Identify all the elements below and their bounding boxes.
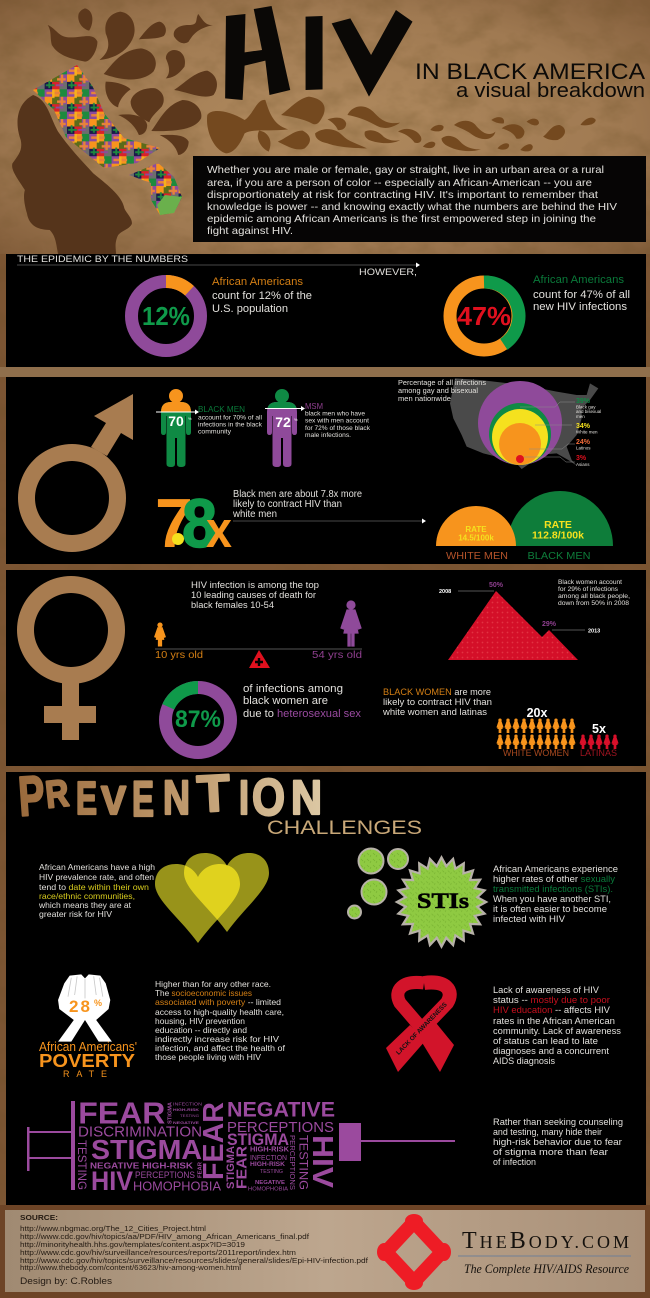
heading: prevention: N [163,772,190,825]
heading: prevention: I [239,772,249,825]
text: decline caption: down from 50% in 2008 [558,600,629,607]
chart: stigma syringe word cloud [27,1095,455,1196]
heading: prevention: N [291,772,322,825]
chart: stigma syringe word cloud: HIV [91,1166,133,1196]
chart: 20x pictogram white women: 20x [527,706,547,720]
text: dating within communities: HIV prevalence rate, and often [39,872,154,882]
text: sources: SOURCE: [20,1213,58,1222]
icon: red awareness ribbon: LACK OF AWARENESS [395,1001,449,1057]
text: 12% of population [212,276,312,315]
text: decline caption: for 29% of infections [558,586,619,593]
chart: infection rate semicircles: 14.5/100k [458,534,494,542]
legend: circle values [576,398,601,467]
text block: introduction panel: fight against HIV. [207,225,293,237]
chart: stigma syringe word cloud: HOMOPHOBIA [133,1178,221,1194]
chart: 20x pictogram white women [497,706,575,758]
text: other STIs: African Americans experience [493,864,618,874]
chart: stigma syringe word cloud: TESTING [260,1169,283,1175]
text block: introduction panel: area, if you are a person of color -- especially an African-American -- you are [207,177,592,189]
chart: stigma syringe word cloud: INFECTION [250,1155,287,1162]
chart: stigma syringe word cloud: PERCEPTIONS [227,1120,334,1136]
icon: black men figure 70%: % [188,416,192,421]
panel: the epidemic by the numbers [6,254,646,367]
chart: infection rate semicircles: 112.8/100k [532,530,584,542]
text: heterosexual sex: black women are [243,695,328,707]
header illustration: flowing drops [48,8,596,155]
text: lack of awareness: AIDS diagnosis [493,1056,555,1066]
heading: epidemic by the numbers: HOWEVER, [359,267,417,278]
icon: overlapping hearts [155,853,269,943]
text: map caption: Percentage of all infections [398,378,486,387]
legend: circle values: 24% [576,439,591,446]
text: other STIs: transmitted infections (STIs). [493,884,613,894]
icon: poverty rate hands 28%: POVERTY [39,1051,135,1071]
chart: stigma syringe word cloud: HIGH-RISK [250,1147,289,1154]
chart: 5x pictogram latinas [580,722,618,758]
text: socioeconomic issues: access to high-quality health care, [155,1007,284,1017]
text: 47% of infections: African Americans [533,274,625,286]
chart: 87% donut [166,688,230,752]
text block: introduction panel: disproportionately at risk for contracting HIV. It's important to remember that [207,189,598,201]
icon: poverty rate hands 28%: 28 [69,997,92,1016]
text: socioeconomic issues: education -- directly and [155,1025,247,1035]
chart: 2008 to 2013 decline: 2008 [439,589,451,595]
chart: stigma syringe word cloud: TESTING [75,1140,89,1190]
text block: introduction panel: epidemic among African Americans is the first empowered step in joining the [207,213,596,225]
chart: age timeline with figures [155,601,362,668]
text: map caption: among gay and bisexual [398,386,478,395]
big number: 7.8x: 7 [155,484,193,562]
chart: stigma syringe word cloud: HOMOPHOBIA [248,1186,289,1192]
icon: red linked hands logo [377,1214,451,1290]
text block: introduction panel: knowledge is power -- and knowing exactly what the numbers are behind the HIV [207,201,617,213]
logo: TheBody.com wordmark: The Complete HIV/AIDS Resource [464,1261,629,1276]
chart: 12% donut [132,282,200,350]
text: MSM stat: black men who have [305,410,365,418]
chart: stigma syringe word cloud: INFECTION [173,1102,202,1106]
heading: epidemic by the numbers [17,254,420,278]
text: sources: http://www.cdc.gov/hiv/surveillance/resources/reports/2011report/index.htm [20,1248,296,1257]
text: black women more likely: likely to contract HIV than [383,697,492,708]
icon: poverty rate hands 28%: % [94,998,102,1008]
text: other STIs [493,864,618,924]
text: other STIs: higher rates of other sexually [493,874,616,884]
chart: stigma syringe word cloud: STIGMA [227,1130,289,1149]
text: dating within communities [38,862,155,919]
text: other STIs: When you have another STI, [493,894,611,904]
heading: prevention: V [101,779,126,823]
text: lack of awareness: Lack of awareness of HIV [493,985,599,995]
text: 7.8x more likely: Black men are about 7.8x more [233,489,362,500]
icon: patterned head scarf [33,65,182,215]
icon: poverty rate hands 28%: RATE [63,1069,107,1079]
chart: infection rate semicircles: WHITE MEN [446,550,508,562]
text: socioeconomic issues: indirectly increase risk for HIV [155,1034,279,1044]
icon: STIs germ cluster [348,848,488,949]
text: leading causes of death [191,580,319,611]
chart: infection rate semicircles: RATE [544,519,572,531]
icon: syringe plunger and needle [27,1101,455,1190]
text: sources: Design by: C.Robles [20,1276,113,1286]
text: dating within communities: African Americans have a high [39,862,155,872]
text: sources: http://www.cdc.gov/hiv/topics/aa/PDF/HIV_among_African_Americans_final.pdf [20,1232,309,1241]
heading: prevention: T [196,764,232,824]
icon: black men figure 70%: 70 [168,413,184,429]
text: map caption [398,378,486,403]
chart: stigma syringe word cloud: STIGMA [91,1134,202,1165]
text: decline caption: among all black people, [558,593,630,600]
text: 7.8x more likely: white men [232,509,277,520]
text: lack of awareness: status -- mostly due to poor [493,995,610,1005]
legend: circle values: 34% [576,423,591,430]
legend: circle values: White men [576,430,598,434]
text block: introduction panel [193,156,646,242]
chart: stigma syringe word cloud: FEAR [198,1102,230,1180]
text: sources: http://www.cdc.gov/hiv/topics/surveillance/resources/slides/general/slides/Epi-HIV-infection.pdf [20,1256,368,1265]
text: decline caption: Black women account [558,579,622,586]
text: 12% of population: U.S. population [212,303,288,315]
icon: female symbol [17,576,125,740]
chart: 12% donut: 12% [142,301,190,331]
text: fear of stigma: high-risk behavior due to fear [493,1137,622,1147]
chart: stigma syringe word cloud: DISCRIMINATION [78,1125,202,1141]
text: leading causes of death: HIV infection is among the top [191,580,319,591]
text: socioeconomic issues [155,979,286,1062]
text: other STIs: it is often easier to become [493,904,607,914]
text: black men stat: community [198,428,232,436]
text: dating within communities: greater risk for HIV [39,909,112,919]
text: leading causes of death: 10 leading causes of death for [191,590,316,601]
chart: 5x pictogram latinas: 5x [592,722,606,736]
legend: circle values: men [576,414,585,419]
chart: 47% donut: 47% [457,301,511,331]
heading: prevention: P [16,763,47,828]
icon: head silhouette [12,95,132,254]
chart: 2008 to 2013 decline: 50% [489,582,504,589]
icon: poverty rate hands 28% [39,974,137,1079]
heading: challenges: CHALLENGES [267,817,422,839]
text: black men stat: account for 70% of all [198,414,263,422]
text: leading causes of death: black females 10-54 [191,600,274,611]
chart: stigma syringe word cloud: TESTING [180,1114,199,1118]
text: black men stat: infections in the black [198,422,263,428]
chart: stigma syringe word cloud: NEGATIVE [255,1180,286,1186]
text: lack of awareness: rates in the African American [493,1016,615,1026]
chart: age timeline with figures: 54 yrs old [312,650,362,661]
text: fear of stigma: of stigma more than fear [493,1147,608,1157]
big number: 7.8x: x [206,501,232,558]
subtitle: in black america: IN BLACK AMERICA [415,59,645,84]
icon: STIs germ cluster: STIs [417,888,470,913]
text: heterosexual sex: of infections among [243,683,343,695]
chart: 2008 to 2013 decline: 2013 [588,628,600,634]
icon: black men figure 70% [156,389,199,467]
chart: 5x pictogram latinas: LATINAS [580,748,617,758]
chart: stigma syringe word cloud: STIGMA [225,1146,237,1189]
panel: men [6,377,646,564]
text: socioeconomic issues: Higher than for any other race. [155,979,271,989]
text: socioeconomic issues: infection, and affect the health of [155,1043,286,1053]
text: fear of stigma [493,1117,623,1167]
heading: prevention: E [76,772,97,824]
text: decline caption [558,579,630,607]
chart: 87% donut: 87% [175,706,221,733]
text: 47% of infections: new HIV infections [533,301,628,313]
text: MSM stat [305,401,371,439]
legend: circle values: 39% [576,398,591,405]
chart: infection rate semicircles [436,491,613,562]
icon: MSM figure 72% [265,389,305,467]
text: lack of awareness: diagnoses and a concurrent [493,1046,610,1056]
legend: circle values: and bisexual [576,409,601,414]
text: sources [20,1213,368,1286]
heading: prevention: E [132,771,154,827]
subtitle: in black america: a visual breakdown [456,80,645,102]
chart: stigma syringe word cloud: NEGATIVE [227,1098,335,1122]
chart: age timeline with figures: 10 yrs old [155,650,203,661]
heading: epidemic by the numbers: THE EPIDEMIC BY THE NUMBERS [17,254,188,265]
icon: poverty rate hands 28%: African Americans' [39,1039,137,1054]
text: MSM stat: for 72% of those black [305,425,371,432]
chart: stigma syringe word cloud: FEAR [78,1095,165,1130]
subtitle: in black america [415,59,645,102]
text: lack of awareness: community. Lack of awareness [493,1026,622,1036]
text: fear of stigma: Rather than seeking counseling [493,1117,623,1127]
text: sources: http://minorityhealth.hhs.gov/templates/content.aspx?ID=3019 [20,1240,245,1249]
chart: 47% donut [450,282,519,350]
panel: footer sources and logo [0,1205,650,1298]
chart: stigma syringe word cloud: NEGATIVE [173,1120,199,1125]
text: sources: http://www.nbgmac.org/The_12_Cities_Project.html [20,1224,206,1233]
chart: stigma syringe word cloud: PERCEPTIONS [135,1170,195,1181]
chart: stigma syringe word cloud: FEAR [234,1146,250,1189]
text: 47% of infections: count for 47% of all [533,289,630,301]
text: MSM stat: sex with men account [305,418,369,424]
text: socioeconomic issues: housing, HIV prevention [155,1016,245,1026]
chart: stigma syringe word cloud: FEAR [198,1162,204,1178]
text: black women more likely: BLACK WOMEN are more [383,687,491,698]
text: fear of stigma: and testing, many hide their [493,1127,602,1137]
chart: stigma syringe word cloud: HIGH-RISK [173,1107,199,1112]
text block: introduction panel: Whether you are male or female, gay or straight, live in an urban area or a rural [207,164,604,176]
text: lack of awareness [493,985,622,1066]
heading: prevention: R [44,773,71,817]
icon: MSM figure 72%: % [294,417,298,422]
legend: circle values: 3% [576,455,587,462]
logo: TheBody.com wordmark [458,1228,631,1276]
text: dating within communities: which means they are at [38,900,132,910]
text: 12% of population: count for 12% of the [212,290,312,302]
text: 12% of population: African Americans [212,276,304,288]
chart: stigma syringe word cloud: STIGMA [168,1102,174,1124]
text: lack of awareness: of status can lead to late [493,1036,598,1046]
text: dating within communities: tend to date within their own [39,882,149,892]
text: 47% of infections [533,274,630,313]
chart: stigma syringe word cloud: NEGATIVE HIGH-RISK [90,1161,194,1171]
text: other STIs: infected with HIV [493,914,565,924]
text: MSM stat: male infections. [305,432,351,439]
text: dating within communities: race/ethnic communities, [39,891,135,901]
text: sources: http://www.thebody.com/content/63623/hiv-among-women.html [20,1263,241,1272]
text: lack of awareness: HIV education -- affects HIV [493,1005,610,1015]
chart: infection rate semicircles: RATE [465,525,487,534]
big number: 7.8x: 8 [182,485,217,562]
text: map caption: men nationwide [398,394,451,403]
logo: TheBody.com wordmark: THEBODY.COM [462,1228,629,1254]
text: 7.8x more likely: likely to contract HIV than [233,499,342,510]
chart: stigma syringe word cloud: HIGH-RISK [250,1162,286,1168]
chart: 2008 to 2013 decline: 29% [542,621,557,628]
legend: circle values: Asians [576,462,590,467]
text: heterosexual sex [243,683,361,720]
chart: stigma syringe word cloud: TESTING [296,1135,310,1190]
legend: circle values: Latinos [576,446,591,450]
chart: 2008 to 2013 decline [439,579,630,660]
icon: red awareness ribbon [386,982,454,1072]
chart: US map with nested circles [398,378,601,469]
text: black men stat [198,404,263,436]
heading: prevention: O [252,769,285,827]
text: socioeconomic issues: associated with poverty -- limited [155,997,281,1007]
text: fear of stigma: of infection [493,1157,536,1167]
text: black men stat: BLACK MEN [198,404,245,414]
text: heterosexual sex: due to heterosexual sex [243,708,361,720]
text: socioeconomic issues: The socioeconomic issues [155,988,252,998]
legend: circle values: Black gay [576,404,596,410]
panel: women [6,570,646,766]
text: black women more likely [382,687,492,718]
chart: infection rate semicircles: BLACK MEN [528,550,590,562]
chart: 20x pictogram white women: WHITE WOMEN [503,748,569,758]
text: MSM stat: MSM [305,401,323,411]
text: black women more likely: white women and latinas [382,707,487,718]
panel: prevention challenges [6,763,646,1205]
chart: stigma syringe word cloud: PERCEPTIONS [288,1135,295,1190]
heading: prevention [16,763,322,828]
text: 7.8x more likely [232,489,362,520]
big number: 7.8x [155,484,232,562]
chart: stigma syringe word cloud: HIV [306,1135,338,1189]
title: HIV [225,6,413,100]
icon: male symbol [18,394,133,552]
arrow: to rate comparison [233,518,426,524]
text: socioeconomic issues: those people living with HIV [155,1052,261,1062]
icon: MSM figure 72%: 72 [275,414,291,430]
